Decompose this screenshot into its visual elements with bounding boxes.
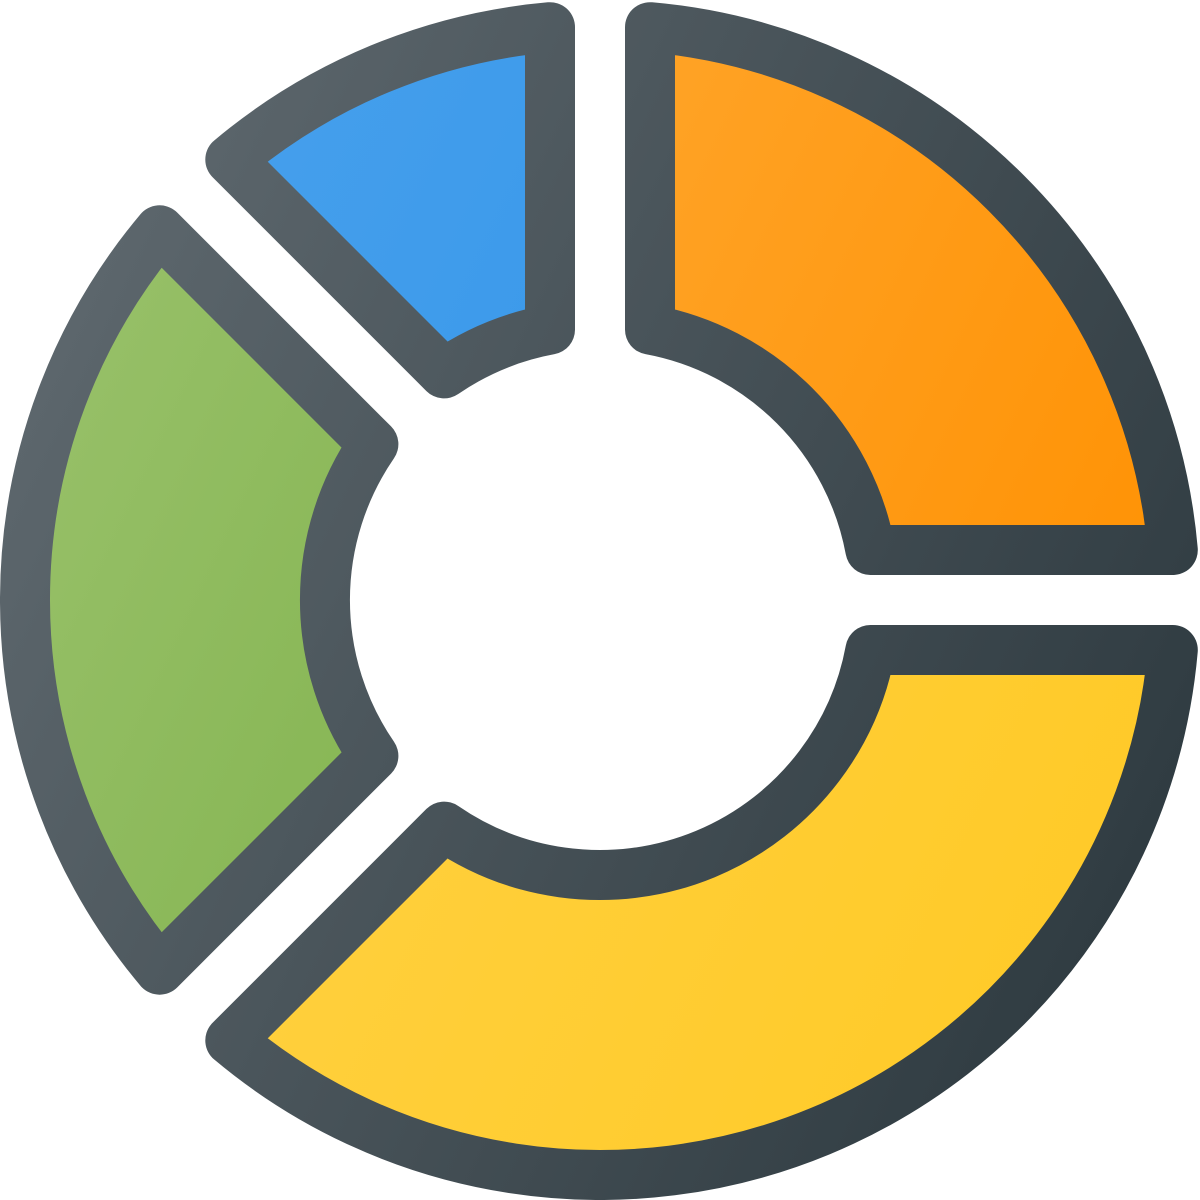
segment: blue: [230, 27, 550, 373]
segment: yellow: [230, 650, 1173, 1175]
segment: orange: [650, 27, 1173, 550]
segment: green: [25, 230, 373, 970]
